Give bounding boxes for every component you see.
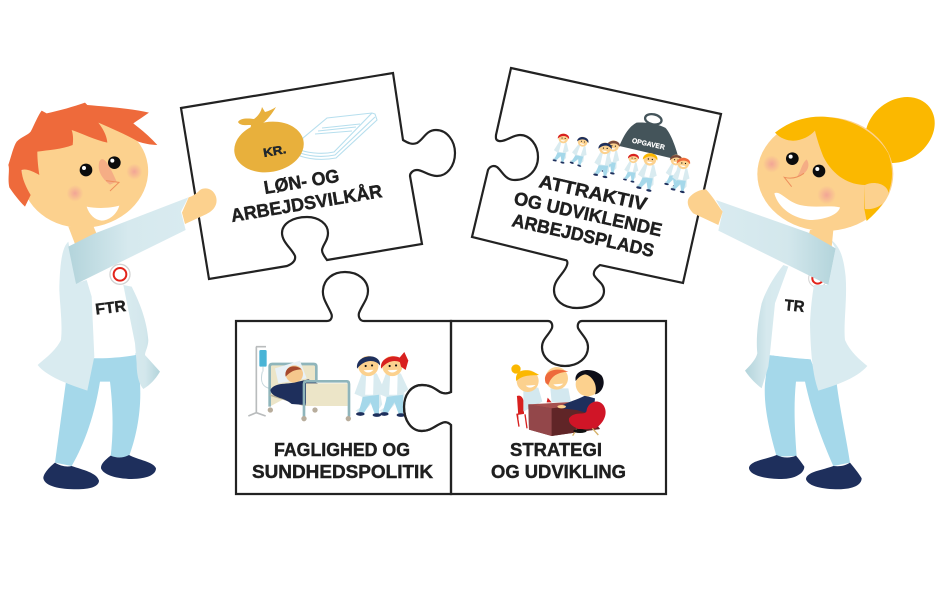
text: Strategi og udvikling: STRATEGI	[510, 439, 602, 460]
text: Faglighed og sundhedspolitik: FAGLIGHED OG	[274, 439, 410, 460]
icon: money bag marked KR. and papers	[230, 107, 377, 178]
text: Attraktiv og udviklende arbejdsplads: ATTRAKTIV	[537, 170, 650, 215]
text: Løn- og arbejdsvilkår: LØN- OG	[262, 165, 341, 198]
text: Strategi og udvikling: OG UDVIKLING	[491, 461, 626, 482]
icon: meeting around a desk	[511, 364, 606, 436]
character: TR woman: TR	[784, 297, 805, 316]
face	[15, 111, 155, 236]
panel: puzzle piece Løn- og arbejdsvilkår	[181, 73, 455, 279]
icon: money bag marked KR. and papers: KR.	[262, 142, 287, 160]
text: Faglighed og sundhedspolitik: SUNDHEDSPOLITIK	[252, 461, 434, 482]
text: Attraktiv og udviklende arbejdsplads	[510, 170, 664, 261]
badge	[110, 264, 130, 284]
panel: puzzle piece Strategi og udvikling	[404, 321, 666, 494]
text: Løn- og arbejdsvilkår: ARBEJDSVILKÅR	[229, 180, 384, 226]
character: TR woman	[688, 83, 941, 489]
character: FTR man	[8, 103, 217, 489]
head	[757, 117, 893, 231]
text: Faglighed og sundhedspolitik	[252, 439, 434, 482]
text: Strategi og udvikling	[491, 439, 626, 482]
text: Attraktiv og udviklende arbejdsplads: ARBEJDSPLADS	[510, 209, 656, 261]
text: Attraktiv og udviklende arbejdsplads: OG UDVIKLENDE	[512, 187, 664, 240]
icon: hospital bed with patient and nurses	[248, 347, 408, 421]
icon: staff carrying a heavy weight: OPGAVER	[631, 138, 665, 152]
bun	[852, 83, 941, 177]
hair	[8, 103, 157, 207]
character: FTR man: FTR	[94, 298, 127, 319]
panel: puzzle piece Attraktiv og udviklende arbejdsplads	[472, 68, 721, 308]
icon: staff carrying a heavy weight	[552, 113, 694, 194]
panel: puzzle piece Faglighed og sundhedspolitik	[236, 272, 451, 494]
